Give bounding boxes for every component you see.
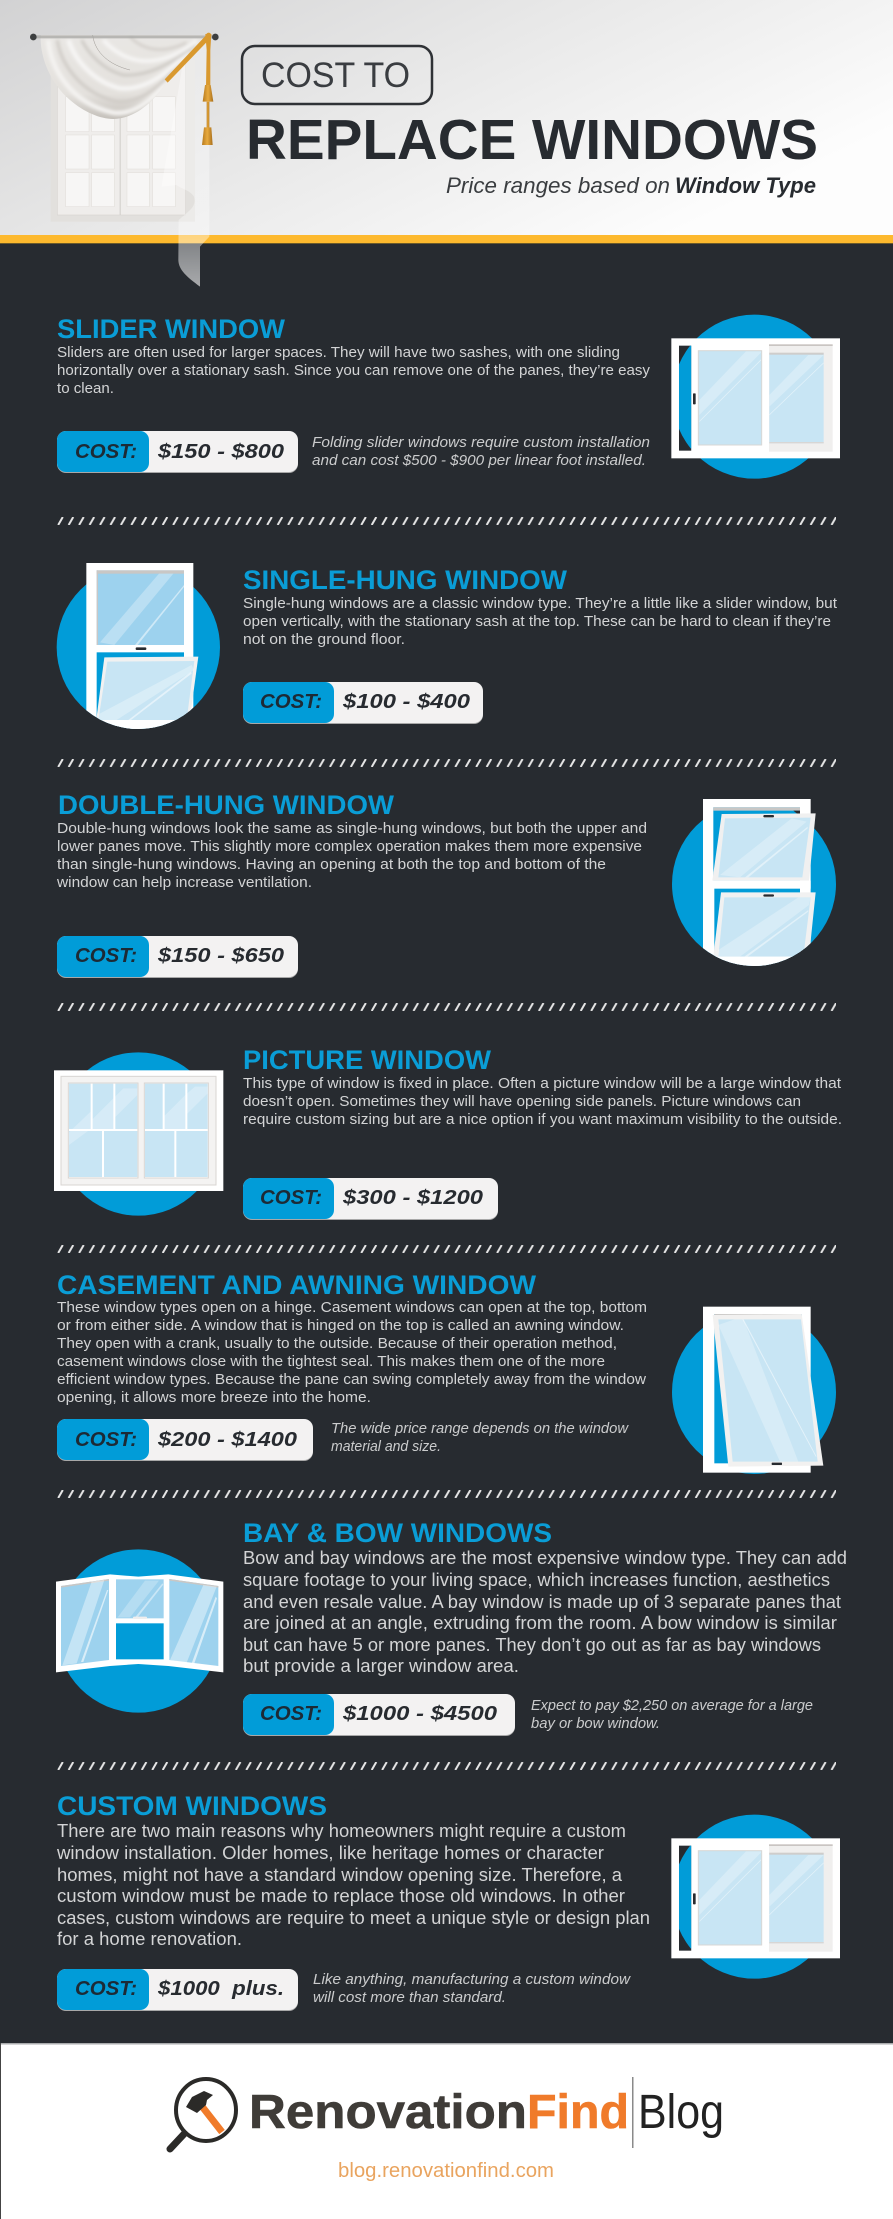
icon: double-hung window [672, 799, 836, 973]
icon: picture window [54, 1052, 223, 1216]
note: bay [531, 1697, 813, 1732]
heading: single-hung window: SINGLE-HUNG WINDOW [243, 565, 567, 595]
cost pill: double-hung [57, 936, 298, 978]
cost pill: casement: $200 - $1400 [157, 1428, 298, 1451]
cost pill: bay: COST: [260, 1702, 322, 1725]
icon: single-hung window [57, 563, 220, 737]
text: casement description: casement windows close with the tightest seal. This makes them one of the more [57, 1353, 605, 1370]
text: casement description [57, 1299, 647, 1406]
cost pill: casement [57, 1419, 313, 1461]
title box: COST TO: COST TO [261, 56, 410, 95]
logo wordmark: Find [527, 2086, 629, 2139]
text: custom description: custom window must be made to replace those old windows. In other [57, 1886, 625, 1906]
text: casement description: They open with a crank, usually to the outside. Because of their operation method, [57, 1335, 617, 1352]
heading: bay and bow windows: BAY & BOW WINDOWS [243, 1518, 552, 1548]
text: bay description: but provide a larger window area. [243, 1656, 519, 1676]
heading: REPLACE WINDOWS: REPLACE WINDOWS [246, 108, 818, 172]
panel: picture window [54, 1045, 842, 1220]
text: picture description [243, 1075, 842, 1128]
heading: picture window: PICTURE WINDOW [243, 1045, 491, 1075]
panel: single-hung window [57, 563, 838, 737]
subtitle: Price ranges based on [446, 173, 670, 198]
text: casement description: or from either side. A window that is hinged on the top is called an awning window. [57, 1317, 624, 1334]
panel: bay and bow windows [56, 1518, 847, 1736]
text: custom description: cases, custom windows are require to meet a unique style or design plan [57, 1908, 650, 1928]
text: double-hung description: Double-hung windows look the same as single-hung windows, but both the upper and [57, 820, 647, 837]
footer panel [0, 2043, 893, 2219]
text: picture description: This type of window is fixed in place. Often a picture window will be a large window that [243, 1075, 842, 1092]
logo wordmark [249, 2077, 724, 2148]
subtitle: Window Type [675, 173, 816, 198]
header panel [0, 0, 893, 244]
text: double-hung description: than single-hung windows. Having an opening at both the top and bottom of the [57, 856, 606, 873]
note: slider [312, 434, 650, 469]
logo: magnifier with hammer [170, 2079, 236, 2149]
cost pill: slider: COST: [75, 440, 137, 463]
text: single-hung description: Single-hung windows are a classic window type. They’re a little like a slider window, but [243, 595, 838, 612]
cost pill: single-hung: $100 - $400 [342, 690, 471, 713]
text: slider description [57, 344, 650, 397]
cost pill: bay [243, 1694, 515, 1736]
panel: double-hung window [56, 790, 836, 978]
note: slider: and can cost $500 - $900 per linear foot installed. [312, 452, 646, 469]
text: picture description: doesn’t open. Sometimes they will have opening side panels. Picture windows can [243, 1093, 801, 1110]
text: custom description: for a home renovation. [57, 1929, 242, 1949]
heading: double-hung window: DOUBLE-HUNG WINDOW [58, 790, 394, 820]
note: casement: The wide price range depends on the window [331, 1420, 629, 1437]
note: bay: Expect to pay $2,250 on average for a large [531, 1697, 813, 1714]
logo wordmark: Blog [638, 2086, 724, 2139]
cost pill: picture [243, 1178, 498, 1220]
text: bay description: and even resale value. A bay window is made up of 3 separate panes that [243, 1592, 841, 1612]
icon: bay window [56, 1549, 223, 1713]
illustration: window with curtain [30, 33, 219, 287]
text: picture description: require custom sizing but are a nice option if you want maximum visibility to the outside. [243, 1111, 842, 1128]
cost pill: double-hung: COST: [75, 944, 137, 967]
panel: custom windows [56, 1791, 840, 2011]
text: casement description: opening, it allows more breeze into the home. [57, 1389, 371, 1406]
icon: casement window [672, 1307, 836, 1474]
text: bay description: square footage to your living space, which increases function, aesthetics [243, 1570, 830, 1590]
text: slider description: horizontally over a stationary sash. Since you can remove one of the panes, they’re easy [57, 362, 650, 379]
cost pill: casement: COST: [75, 1428, 137, 1451]
cost pill: single-hung [243, 682, 483, 724]
text: single-hung description: not on the ground floor. [243, 631, 405, 648]
text: custom description: homes, might not have a standard window opening size. Therefore, a [57, 1865, 623, 1885]
panel: casement and awning window [57, 1270, 836, 1474]
note: custom: Like anything, manufacturing a custom window [313, 1971, 631, 1988]
cost pill: single-hung: COST: [260, 690, 322, 713]
subtitle [446, 173, 816, 198]
heading: custom windows: CUSTOM WINDOWS [57, 1791, 327, 1821]
logo wordmark: Renovation [249, 2086, 527, 2139]
text: single-hung description [243, 595, 838, 648]
text: double-hung description: lower panes move. This slightly more complex operation makes them more expensive [57, 838, 642, 855]
note: casement: material and size. [331, 1438, 441, 1455]
text: custom description: There are two main reasons why homeowners might require a custom [57, 1821, 626, 1841]
cost pill: slider: $150 - $800 [157, 440, 285, 463]
icon: slider window [671, 315, 840, 479]
text: bay description: Bow and bay windows are the most expensive window type. They can add [243, 1548, 847, 1568]
cost pill: picture: $300 - $1200 [342, 1186, 484, 1209]
note: bay: bay or bow window. [531, 1715, 660, 1732]
icon: custom window [671, 1815, 840, 1979]
text: custom description [56, 1821, 650, 1949]
text: double-hung description: window can help increase ventilation. [56, 874, 312, 891]
cost pill: picture: COST: [260, 1186, 322, 1209]
text: slider description: Sliders are often used for larger spaces. They will have two sashes, with one sliding [57, 344, 620, 361]
url: blog.renovationfind.com [338, 2160, 554, 2182]
text: casement description: These window types open on a hinge. Casement windows can open at the top, bottom [57, 1299, 647, 1316]
panel: slider window [57, 314, 840, 479]
cost pill: custom: $1000 plus. [157, 1977, 284, 2000]
text: custom description: window installation. Older homes, like heritage homes or character [56, 1843, 604, 1863]
note: custom [313, 1971, 631, 2006]
text: slider description: to clean. [57, 380, 114, 397]
text: bay description [243, 1548, 847, 1676]
cost pill: custom: COST: [75, 1977, 137, 2000]
note: slider: Folding slider windows require custom installation [312, 434, 650, 451]
cost pill: bay: $1000 - $4500 [342, 1702, 498, 1725]
text: double-hung description [56, 820, 647, 891]
text: bay description: are joined at an angle, extruding from the room. A bow window is similar [243, 1613, 837, 1633]
cost pill: custom [57, 1969, 298, 2011]
title box: COST TO [242, 46, 432, 104]
text: bay description: but can have 5 or more panes. They don’t go out as far as bay windows [243, 1635, 821, 1655]
cost pill: slider [57, 431, 298, 473]
text: casement description: efficient window types. Because the pane can swing completely away from the window [57, 1371, 646, 1388]
heading: casement and awning window: CASEMENT AND AWNING WINDOW [57, 1270, 536, 1300]
text: single-hung description: open vertically, with the stationary sash at the top. These can be hard to clean if they’re [243, 613, 831, 630]
note: casement [331, 1420, 629, 1455]
cost pill: double-hung: $150 - $650 [157, 944, 285, 967]
note: custom: will cost more than standard. [313, 1989, 506, 2006]
heading: slider window: SLIDER WINDOW [57, 314, 285, 344]
